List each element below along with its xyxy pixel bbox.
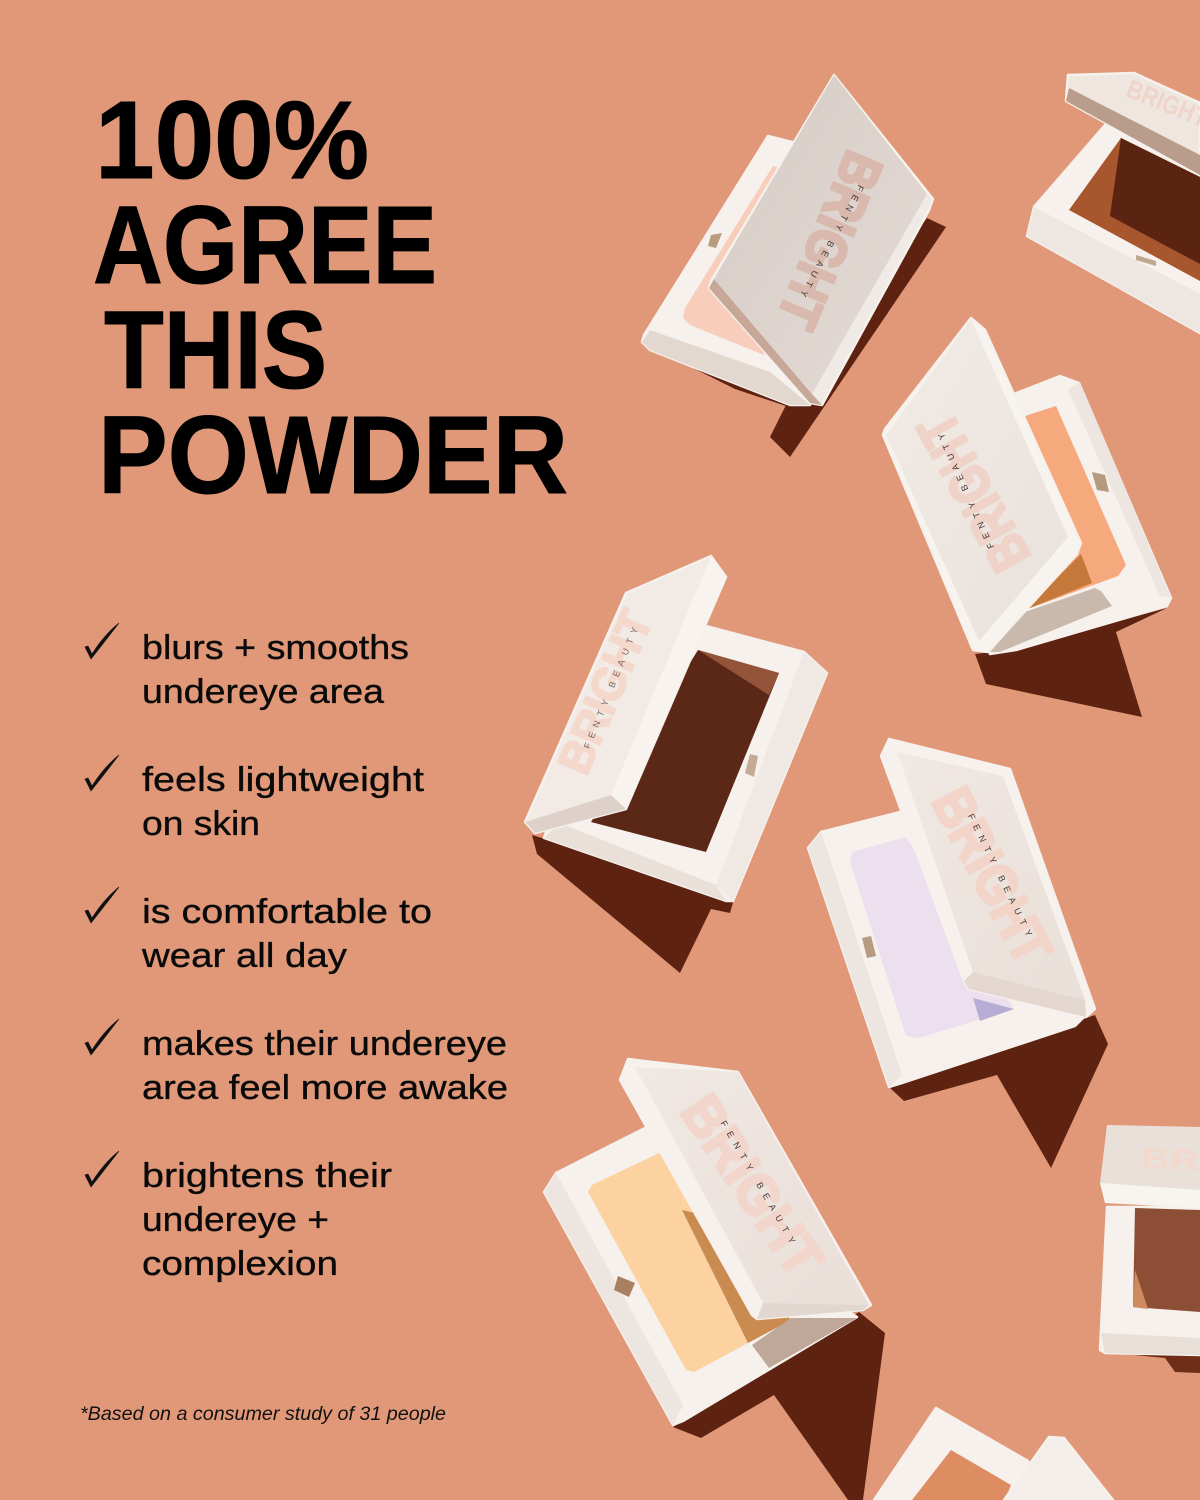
compact: pink, top: BRIGHT [765,143,896,338]
item: more awake: makes their undereye [142,1025,507,1063]
title: THIS [104,289,327,412]
checklist [85,623,508,1283]
item: brightens: undereye + [142,1201,329,1239]
compact: lavender: FENTY BEAUTY [966,812,1034,938]
compact: sand: BRIGHT [669,1083,836,1288]
compact: brown, right edge: BRI [1140,1142,1200,1179]
compact: terracotta, bottom edge [874,1408,1113,1500]
item: blurs + smooths: undereye area [142,673,384,711]
item: feels lightweight [85,755,425,843]
compact: deep shade, open left [525,556,827,973]
compact: pink, top: FENTY BEAUTY [798,183,866,299]
title: 100% [95,79,369,202]
compact: brown, right edge [1100,1125,1200,1373]
title: AGREE [93,184,437,307]
compact: sand [544,1059,885,1500]
item: brightens: complexion [142,1245,338,1283]
compact: pink, top [642,75,946,457]
compact: deep shade, open left: BRIGHT [547,603,663,781]
compact: dark shade, top right [1027,73,1200,333]
compact: lavender: BRIGHT [920,777,1065,974]
compact: deep shade, open left: FENTY BEAUTY [582,626,640,750]
footnote: *Based on a consumer study of 31 people [80,1404,446,1425]
item: blurs + smooths [85,623,409,711]
item: blurs + smooths: blurs + smooths [142,629,409,667]
compact: peach [883,318,1171,717]
item: comfortable: wear all day [141,937,347,975]
compact: peach: FENTY BEAUTY [936,432,996,550]
item: more awake [85,1019,508,1107]
title: POWDER [98,394,568,517]
item: comfortable: is comfortable to [142,893,432,931]
compact: sand: FENTY BEAUTY [719,1119,797,1245]
item: more awake: area feel more awake [142,1069,508,1107]
item: feels lightweight: feels lightweight [142,761,425,799]
title [93,79,568,517]
item: comfortable [85,887,432,975]
item: feels lightweight: on skin [142,805,260,843]
compact: peach: BRIGHT [905,403,1042,582]
compact: lavender [808,739,1108,1168]
item: brightens [85,1151,392,1283]
item: brightens: brightens their [142,1157,392,1195]
